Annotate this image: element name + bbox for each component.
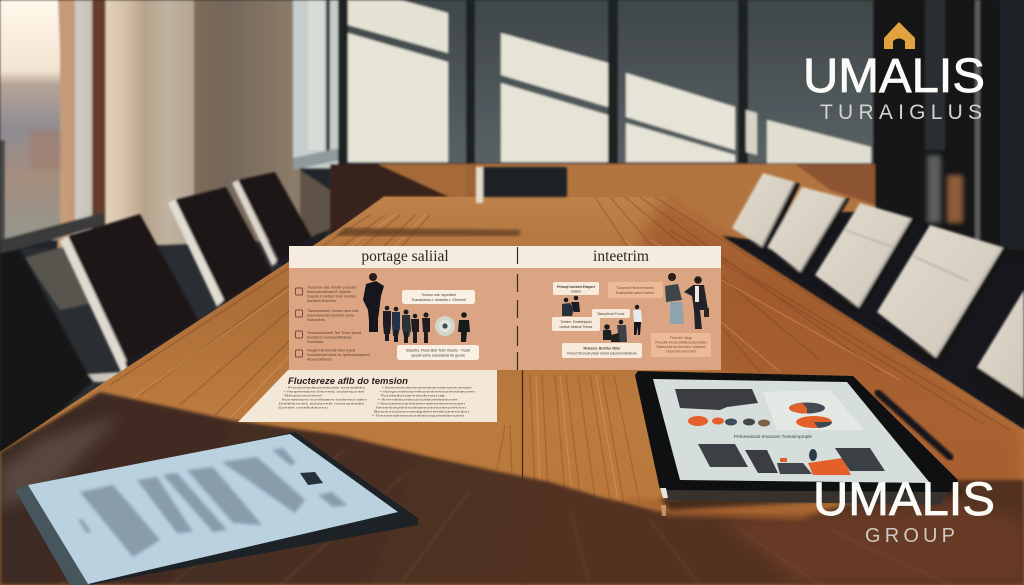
callout 6: Pnbudrt I Iluay — [670, 336, 692, 340]
lower sheet — [238, 370, 497, 422]
people: shaking hands pair — [562, 296, 580, 316]
chair 5 — [968, 290, 1024, 424]
callout 1 — [553, 282, 599, 295]
grain in shade — [60, 440, 950, 585]
wooden wainscot — [330, 164, 875, 239]
warm reddish right side of the table — [640, 197, 1024, 585]
callout 2 — [608, 282, 663, 298]
title: inteetrim: inteetrim — [593, 248, 649, 265]
lower sheet text left: • Ilsnpeestions ilisoretic otolpiscontal — [284, 390, 365, 394]
chair 4 — [232, 172, 335, 270]
document text — [78, 448, 347, 557]
callout 1: Priosqt Ivorbtnt Ehapert — [557, 285, 596, 289]
lower sheet text right: Toniisilonaresiolmsurat — [380, 394, 445, 398]
lower sheet text left: - Prsouinesolaconsticotas usimolabbo — [285, 386, 366, 390]
item 1: Asuiterit ilhonime — [307, 299, 336, 303]
right chairs — [726, 173, 1024, 424]
lower sheet text right: Bosoinmoitsonsantgoletmerisitoesmoiton — [374, 410, 470, 414]
back wall glass panels — [338, 0, 875, 168]
title: portage saliial: portage saliial — [361, 248, 449, 265]
right dark area and door — [873, 0, 1024, 420]
tablet: bottom blocks — [698, 444, 885, 475]
people: large man — [363, 273, 384, 332]
tablet: pie bottom — [796, 416, 832, 428]
item 4 — [296, 348, 370, 362]
tablet screen — [653, 379, 930, 483]
item 1: Immonsrotimdes® iripistin — [307, 290, 351, 294]
chair 3 — [168, 187, 285, 312]
chair 2 — [60, 214, 205, 382]
callout: bottom left — [397, 345, 479, 360]
grey sheen on dark wood — [0, 415, 120, 510]
lower sheet heading: Fluctereze aflb do temsion — [288, 376, 408, 387]
lower sheet text left: "Melquomsomesis" — [283, 394, 323, 398]
tablet — [635, 371, 965, 516]
item 2 — [296, 309, 359, 322]
lower sheet text right: • Itsonetemoirslotesmaierinsiseretoam — [377, 402, 466, 406]
right panel callouts — [552, 282, 711, 358]
chair 4 — [868, 225, 1008, 364]
panel body — [289, 268, 721, 370]
paper — [28, 434, 398, 584]
checklist — [296, 286, 370, 362]
tagline: TURAIGLUS — [820, 101, 982, 124]
wood grain — [110, 197, 1010, 505]
far table shadow streak — [335, 228, 520, 236]
callout: bottom left: iquesti uelse Ioacsatrisit de guode — [411, 354, 465, 358]
item 1: Tresorion lise rehotin pesesid — [307, 286, 356, 290]
logo bottom right — [813, 472, 995, 547]
chair 1 — [0, 250, 92, 452]
lower sheet text right: • Ilsounstinotionsoamettiatorsamoisemerator — [382, 386, 472, 390]
item 4: Ftagsi Flemismite Meri Ipsuit — [307, 348, 356, 352]
clipboard with document — [15, 432, 418, 585]
header strip — [289, 246, 721, 268]
pen — [878, 393, 950, 457]
callout 2: Examplerlio judent Inetorn — [616, 291, 654, 295]
callout 3: Bssupft nut Fronst — [598, 312, 624, 316]
callout 4 — [552, 317, 600, 331]
callout: top left: Tncluor use inyorated — [421, 293, 456, 297]
back centre chair — [476, 167, 567, 203]
left wall — [58, 0, 300, 290]
tablet: pie panel — [763, 390, 864, 430]
callout 6: Tiomerinsosel finstor — [666, 350, 697, 354]
callout 6: Pnesotie inlvoe ertfisinoensponsiter — [655, 340, 708, 344]
tagline: GROUP — [865, 525, 955, 547]
people: large man right — [684, 276, 709, 329]
item 3: Traeszaorcoest Ten Tresrt Ipsuit — [307, 331, 362, 335]
lower sheet text left: Ilsonsisistors monelsaties sodinesot salim — [282, 398, 368, 402]
item 3: Sudotiisia — [307, 340, 324, 344]
network circle icon — [435, 316, 455, 336]
callout 1: hoanet — [571, 290, 581, 294]
people: large woman — [665, 273, 684, 324]
orange glow under tablet — [620, 498, 840, 520]
callout 4: Tertsier. Emelsiriqulet — [560, 320, 592, 324]
tablet body — [635, 371, 958, 516]
icon: house — [884, 22, 915, 49]
second window — [293, 0, 340, 170]
item 4: Atoonsariienes — [307, 358, 332, 362]
lower sheet text left: Ibeltisimosis solotoretit insorquesitis — [279, 402, 365, 406]
lower sheet text right: • Ilnemitisoniscomotsioelistisoner — [378, 398, 458, 402]
callout 5: Rslesset. Brofrtur iltitor — [583, 346, 621, 350]
item 2: Sueosiees — [307, 318, 325, 322]
people: standing person — [633, 305, 642, 335]
callout 4: ulelssir Ietatsur Tresse — [560, 325, 593, 329]
dark zone behind right chairs — [722, 212, 1024, 429]
floor under chairs — [0, 170, 345, 450]
lower sheet text right: • Ilongronsifoicrelsosiminetmoniesbiatoren — [380, 390, 476, 394]
lower sheet text left — [278, 386, 368, 410]
left chairs — [0, 172, 335, 452]
people: man right — [458, 312, 470, 342]
callout: top left — [402, 290, 475, 304]
board — [15, 432, 418, 585]
left window — [0, 0, 105, 254]
people: group of five — [383, 306, 430, 343]
item 2: Tlaevulesiivet. Inosim sine tost — [307, 309, 359, 313]
chair 1 — [726, 173, 800, 252]
item 1 — [296, 286, 356, 303]
chair 2 — [762, 187, 850, 278]
table top — [0, 197, 1024, 585]
logo top right — [803, 22, 985, 124]
lower sheet text right: • Toerntimaiserusoniitsionquessiamuent — [372, 414, 464, 418]
callout 5: Fneret Ohonost yfrsei smiert ancoenl iuthotnoie — [567, 352, 637, 356]
wordmark: UMALIS — [813, 472, 995, 525]
lighter brown patch in bottom shade — [720, 505, 1024, 585]
item 1: Suporn Frontiert Ironi moniee — [307, 294, 356, 298]
callout 6 — [651, 333, 711, 357]
callout: bottom left: Bsacitio, Fludo Blot Tetsr Vtastiu · Tluait — [406, 348, 470, 352]
lower sheet text left: Soinlet uineliolisomu — [278, 406, 329, 410]
people: seated group — [603, 320, 627, 342]
callout 3 — [592, 309, 630, 318]
tablet: legend dots — [688, 416, 770, 426]
document photo — [300, 472, 323, 485]
callout 2: Tlosorest Flinek thesense — [616, 286, 654, 290]
tablet: pie top — [789, 402, 825, 414]
callout 6: Reseoodot sin Ihmnivot i ipisolnm — [656, 345, 706, 349]
item 2: Iroubobinurat Epmiast suine — [307, 314, 354, 318]
chair 3 — [808, 203, 916, 312]
lower sheet text right — [372, 386, 476, 418]
floating document: comparison — [238, 246, 721, 422]
wordmark: UMALIS — [803, 50, 985, 103]
item 3: Ireotsinet Iosbopeditirabos — [307, 336, 352, 340]
callout: top left: Thanacitons.t. Inocletto.r. Ghemeit — [411, 298, 466, 302]
table seam — [522, 370, 524, 585]
shaded foreground — [0, 392, 1024, 585]
tablet shadow — [660, 486, 965, 510]
tablet: dark info box — [675, 389, 758, 410]
item 4: Inosotimoierulose to. Ipetinsolsaqued — [307, 353, 370, 357]
item 3 — [296, 331, 362, 344]
callout 5 — [562, 343, 642, 358]
tablet: caption: Pefoessionsl Imouseis Tonesimprople — [734, 434, 813, 439]
lower sheet text right: Ilsnerfosoliminotisamoteriontnoseinim — [376, 406, 467, 410]
